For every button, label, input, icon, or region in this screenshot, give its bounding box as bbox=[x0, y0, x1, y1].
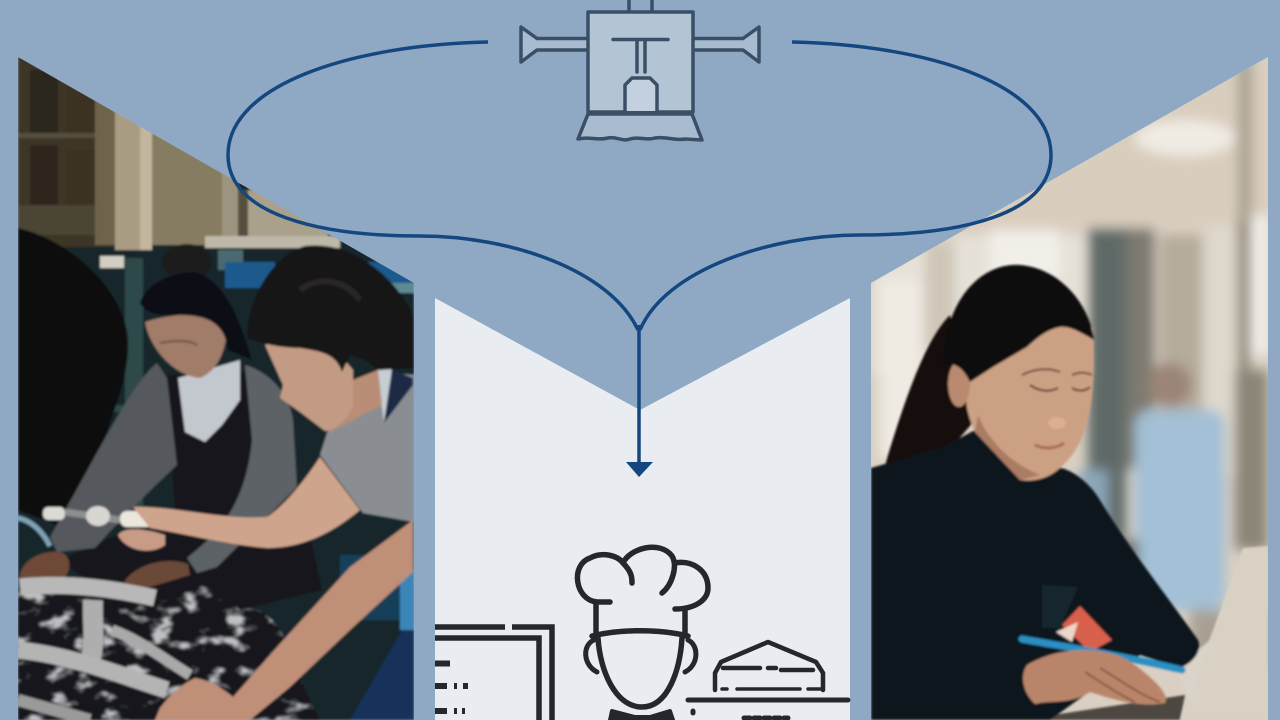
neck and face bbox=[145, 314, 227, 378]
press base bbox=[578, 114, 702, 140]
ponytail bbox=[884, 315, 975, 470]
engine bbox=[18, 580, 328, 720]
press handle bbox=[613, 40, 668, 72]
panel: centre white chevron panel bbox=[435, 298, 850, 720]
hair bbox=[943, 265, 1094, 382]
left hand bbox=[20, 552, 69, 582]
dark apron and lap bbox=[60, 372, 322, 610]
face and neck bbox=[966, 323, 1094, 480]
lower arm bbox=[155, 520, 413, 720]
right hand bbox=[124, 561, 190, 590]
shelf bbox=[688, 698, 848, 702]
black shirt bbox=[871, 430, 1199, 720]
pocket bbox=[1042, 585, 1078, 628]
bun bbox=[162, 244, 212, 280]
right funnel arm bbox=[693, 27, 759, 62]
face bbox=[265, 341, 353, 431]
panel: right photo of a woman writing at a laptop bbox=[871, 57, 1268, 720]
forearm bbox=[133, 457, 360, 548]
red object bbox=[1062, 606, 1112, 652]
menu lines bbox=[435, 660, 450, 666]
left sleeve bbox=[50, 363, 177, 552]
desk bbox=[1050, 694, 1186, 720]
white shirt bbox=[178, 360, 240, 442]
arrow: left flow curve bbox=[228, 42, 638, 330]
chef hat bbox=[577, 555, 632, 602]
bow tie bbox=[610, 711, 673, 720]
icon: chef bbox=[577, 547, 708, 720]
hair bbox=[140, 272, 252, 360]
press box bbox=[588, 12, 693, 112]
blue pants bbox=[350, 630, 414, 720]
woman one bbox=[20, 244, 322, 610]
collar bbox=[377, 368, 392, 423]
hair bbox=[247, 245, 414, 372]
white tool bbox=[43, 506, 165, 551]
icon: menu board bbox=[435, 627, 552, 720]
left funnel arm bbox=[521, 27, 588, 62]
woman two bbox=[133, 245, 414, 720]
press door bbox=[625, 78, 657, 111]
chef ears bbox=[586, 640, 696, 672]
hands bbox=[1023, 650, 1166, 705]
arrow: down to chef bbox=[626, 325, 653, 477]
shirt bbox=[320, 372, 414, 522]
neck bbox=[330, 370, 382, 432]
dark machine at left bbox=[18, 228, 128, 530]
workshop background bbox=[18, 57, 414, 620]
top stem bbox=[629, 0, 652, 12]
chef head bbox=[598, 638, 682, 707]
blue pipe bbox=[18, 518, 50, 546]
right sleeve bbox=[187, 365, 297, 573]
ear bbox=[948, 361, 970, 407]
blurred office background bbox=[871, 57, 1268, 670]
panel: left photo of two women working on an engine bbox=[18, 57, 414, 720]
icon: covered dish on shelf bbox=[688, 642, 848, 718]
laptop bbox=[1180, 546, 1268, 720]
arrow: right flow curve bbox=[640, 42, 1051, 330]
pen bbox=[1022, 639, 1182, 670]
icon: machine press at top bbox=[521, 0, 759, 140]
